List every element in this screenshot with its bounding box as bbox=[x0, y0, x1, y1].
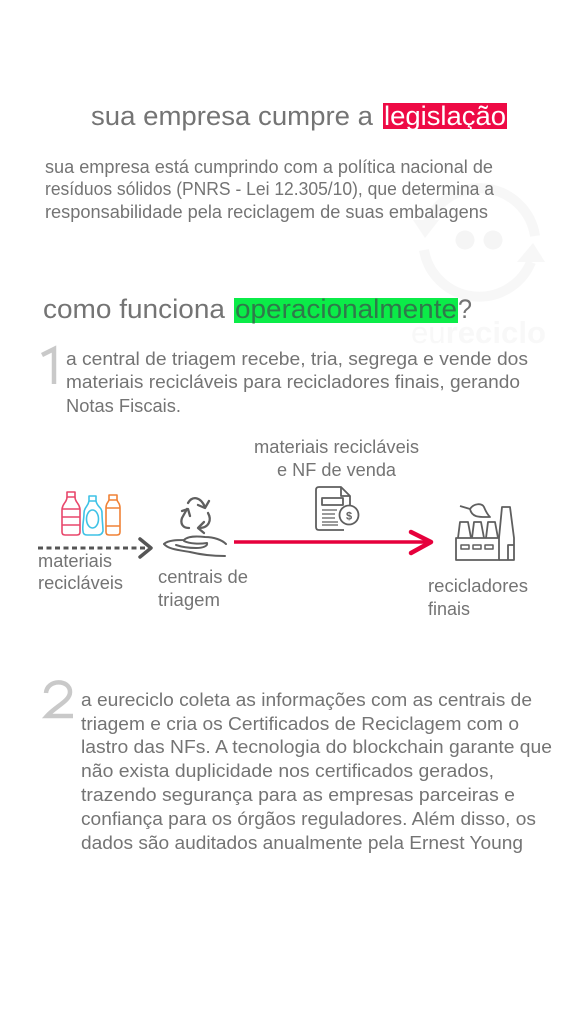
label: recicladores finais: recicladores bbox=[428, 576, 528, 596]
step 1 text: Notas Fiscais. bbox=[66, 396, 181, 416]
icon: recycling symbol over hand bbox=[164, 498, 226, 556]
heading: como funciona operacionalmente bbox=[43, 294, 472, 324]
heading: como funciona operacionalmente: ? bbox=[458, 294, 472, 324]
step 2 text: trazendo segurança para as empresas parceiras e bbox=[81, 785, 515, 805]
intro text block: sua empresa está cumprindo com a política nacional de bbox=[45, 157, 493, 177]
icon: invoice document: $ bbox=[346, 510, 352, 522]
title: sua empresa cumpre a bbox=[91, 101, 374, 131]
intro text block: responsabilidade pela reciclagem de suas embalagens bbox=[45, 202, 488, 222]
flow label: materiais recicláveis e NF de venda bbox=[254, 437, 419, 480]
step 1 text bbox=[66, 349, 528, 416]
heading: como funciona operacionalmente: operacionalmente bbox=[235, 294, 457, 324]
label: centrais de triagem: centrais de bbox=[158, 567, 248, 587]
icon: invoice document bbox=[316, 487, 358, 530]
flow label: materiais recicláveis e NF de venda: materiais recicláveis bbox=[254, 437, 419, 457]
icon: bottles bbox=[62, 492, 120, 535]
step 2 text: triagem e cria os Certificados de Reciclagem com o bbox=[81, 714, 519, 734]
red arrow bbox=[234, 532, 431, 553]
label: materiais recicláveis: materiais bbox=[38, 551, 112, 571]
icon: factory with leaf bbox=[456, 504, 514, 560]
heading: como funciona operacionalmente: como funciona bbox=[43, 294, 226, 324]
label: materiais recicláveis: recicláveis bbox=[38, 573, 123, 593]
step 2 text: não exista duplicidade nos certificados gerados, bbox=[81, 761, 494, 781]
intro text block bbox=[45, 157, 495, 222]
step 2 text: a eureciclo coleta as informações com as centrais de bbox=[81, 690, 532, 710]
label: recicladores finais: finais bbox=[428, 599, 470, 619]
watermark: eureciclo logo: eureciclo bbox=[411, 315, 546, 350]
label: recicladores finais bbox=[428, 576, 528, 619]
title bbox=[91, 101, 507, 131]
title: legislação bbox=[384, 101, 506, 131]
step number 1 bbox=[42, 349, 54, 384]
watermark: eureciclo logo bbox=[411, 188, 546, 350]
label: materiais recicláveis bbox=[38, 551, 123, 593]
step 2 text: dados são auditados anualmente pela Ernest Young bbox=[81, 833, 523, 853]
step 2 text bbox=[81, 690, 552, 853]
step 2 text: lastro das NFs. A tecnologia do blockchain garante que bbox=[81, 737, 552, 757]
step 2 text: confiança para os órgãos reguladores. Além disso, os bbox=[81, 809, 536, 829]
step number 2 bbox=[46, 682, 73, 716]
label: centrais de triagem: triagem bbox=[158, 590, 220, 610]
dotted arrow bbox=[38, 539, 151, 557]
label: centrais de triagem bbox=[158, 567, 248, 610]
intro text block: resíduos sólidos (PNRS - Lei 12.305/10), que determina a bbox=[45, 179, 495, 199]
flow label: materiais recicláveis e NF de venda: e NF de venda bbox=[277, 460, 397, 480]
step 1 text: a central de triagem recebe, tria, segrega e vende dos bbox=[66, 349, 528, 369]
step 1 text: materiais recicláveis para recicladores finais, gerando bbox=[66, 372, 520, 392]
